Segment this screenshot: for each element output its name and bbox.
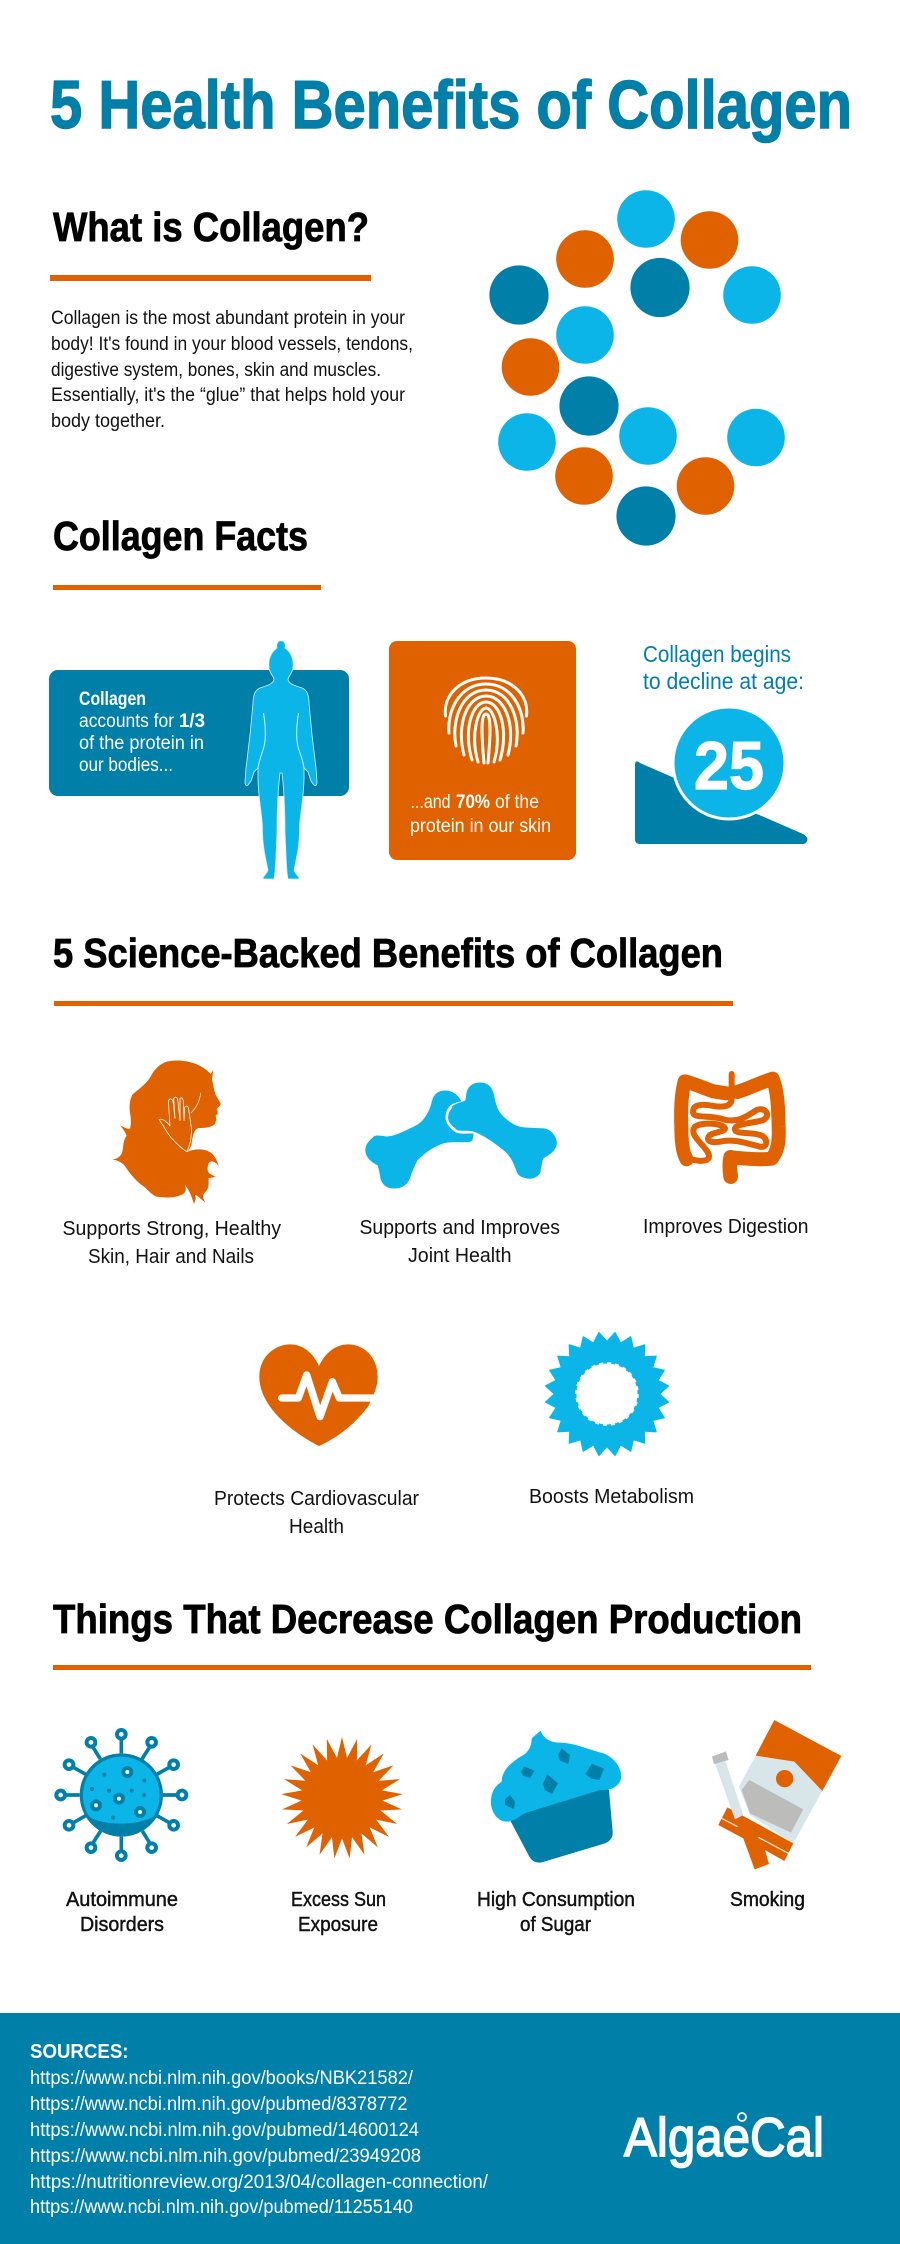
- logo: AlgaeCal: AlgaeCal: [624, 2106, 824, 2168]
- icon: joint bones: [366, 1083, 556, 1188]
- text block: autoimmune label: Autoimmune: [66, 1888, 178, 1911]
- text block: cardiovascular label: Health: [289, 1516, 344, 1538]
- panel: autoimmune disorders: [56, 1730, 186, 1936]
- label: smoking: Smoking: [730, 1888, 805, 1911]
- heading: science-backed benefits: 5 Science-Backed Benefits of Collagen: [53, 930, 723, 976]
- text block: skin label: Supports Strong, Healthy: [62, 1218, 281, 1240]
- text block: cardiovascular label: Protects Cardiovascular: [214, 1488, 419, 1510]
- text block: sources: SOURCES:: [30, 2041, 128, 2063]
- text block: sources: https://www.ncbi.nlm.nih.gov/pubmed/8378772: [30, 2094, 408, 2115]
- text block: cardiovascular label: [214, 1488, 419, 1538]
- text block: sources: https://www.ncbi.nlm.nih.gov/books/NBK21582/: [30, 2068, 414, 2089]
- heading: collagen facts: [53, 513, 321, 590]
- text block: sun label: Exposure: [298, 1913, 378, 1936]
- panel: smoking: [712, 1720, 841, 1911]
- text block: sources: https://www.ncbi.nlm.nih.gov/pubmed/11255140: [30, 2197, 413, 2218]
- heading: collagen facts: Collagen Facts: [53, 513, 308, 559]
- text block: collagen description: body together.: [51, 411, 165, 432]
- panel: cardiovascular health: [214, 1344, 419, 1538]
- text block: sources: [30, 2041, 489, 2218]
- text block: decline label: [643, 641, 804, 694]
- text block: sugar label: High Consumption: [477, 1888, 635, 1911]
- text block: sugar label: [477, 1888, 635, 1936]
- text block: sources: https://www.ncbi.nlm.nih.gov/pubmed/14600124: [30, 2120, 419, 2141]
- text block: skin protein fact: [410, 792, 551, 837]
- panel: one third of body protein: [49, 641, 349, 879]
- text block: body protein fact: 1/3: [179, 711, 205, 732]
- text block: skin label: [62, 1218, 281, 1268]
- panel: digestion: [643, 1074, 808, 1238]
- panel: metabolism: [529, 1332, 694, 1508]
- text block: body protein fact: [79, 689, 205, 776]
- text block: body protein fact: Collagen: [79, 689, 146, 710]
- panel: footer: [0, 2013, 900, 2244]
- text block: sun label: Excess Sun: [291, 1888, 386, 1911]
- text block: joint label: [360, 1217, 560, 1267]
- text block: joint label: Supports and Improves: [360, 1217, 560, 1239]
- panel: skin hair and nails: [62, 1060, 281, 1268]
- icon: fingerprint: [445, 678, 527, 763]
- text block: collagen description: body! It's found in your blood vessels, tendons,: [51, 334, 413, 355]
- heading: what is collagen: What is Collagen?: [53, 204, 369, 250]
- text block: collagen description: Essentially, it's the “glue” that helps hold your: [51, 385, 406, 406]
- text block: joint label: Joint Health: [408, 1245, 512, 1267]
- text block: sources: https://nutritionreview.org/2013/04/collagen-connection/: [30, 2172, 489, 2193]
- panel: decline at age 25: [635, 641, 808, 844]
- text block: body protein fact: accounts for: [79, 711, 175, 732]
- icon: age circle: [672, 706, 786, 820]
- text block: collagen description: digestive system, bones, skin and muscles.: [51, 360, 381, 381]
- icon: sun: [281, 1737, 403, 1859]
- panel: sugar: [477, 1731, 635, 1936]
- label: digestion: Improves Digestion: [643, 1216, 808, 1238]
- panel: joint health: [360, 1083, 560, 1267]
- icon: slope: [635, 761, 808, 844]
- heading: science-backed benefits: [53, 930, 733, 1006]
- icon: gear: [545, 1332, 669, 1456]
- text block: collagen description: Collagen is the most abundant protein in your: [51, 308, 406, 329]
- heading: things that decrease collagen: Things That Decrease Collagen Production: [53, 1596, 802, 1642]
- text block: skin protein fact: ...and: [410, 792, 450, 813]
- icon: muffin: [491, 1731, 621, 1863]
- icon: woman profile with hand: [112, 1060, 221, 1204]
- text block: sugar label: of Sugar: [520, 1913, 591, 1936]
- text block: skin protein fact: 70%: [456, 792, 490, 813]
- icon: cigarette pack: [712, 1720, 841, 1869]
- text block: decline label: to decline at age:: [643, 668, 804, 694]
- text block: sources: https://www.ncbi.nlm.nih.gov/pubmed/23949208: [30, 2146, 421, 2167]
- icon: age circle: 25: [694, 728, 764, 804]
- icon: female body silhouette: [245, 641, 317, 879]
- text block: skin label: Skin, Hair and Nails: [88, 1246, 254, 1268]
- label: metabolism: Boosts Metabolism: [529, 1486, 694, 1508]
- text block: skin protein fact: protein in our skin: [410, 816, 551, 837]
- text block: decline label: Collagen begins: [643, 641, 791, 667]
- text block: sun label: [291, 1888, 386, 1936]
- text block: autoimmune label: [66, 1888, 178, 1936]
- icon: intestines: [681, 1074, 779, 1177]
- panel: seventy percent of skin protein: [389, 641, 576, 860]
- icon: circle ring of molecules: [489, 190, 785, 546]
- panel: sun exposure: [281, 1737, 403, 1936]
- icon: heart with pulse: [259, 1344, 387, 1446]
- text block: body protein fact: our bodies...: [79, 755, 173, 776]
- text block: body protein fact: of the protein in: [79, 733, 204, 754]
- text block: collagen description: [51, 308, 413, 432]
- text block: autoimmune label: Disorders: [80, 1913, 164, 1936]
- heading: things that decrease collagen: [53, 1596, 811, 1670]
- text block: skin protein fact: of the: [495, 792, 539, 813]
- icon: virus: [56, 1730, 186, 1860]
- panel: what is collagen: [50, 204, 413, 432]
